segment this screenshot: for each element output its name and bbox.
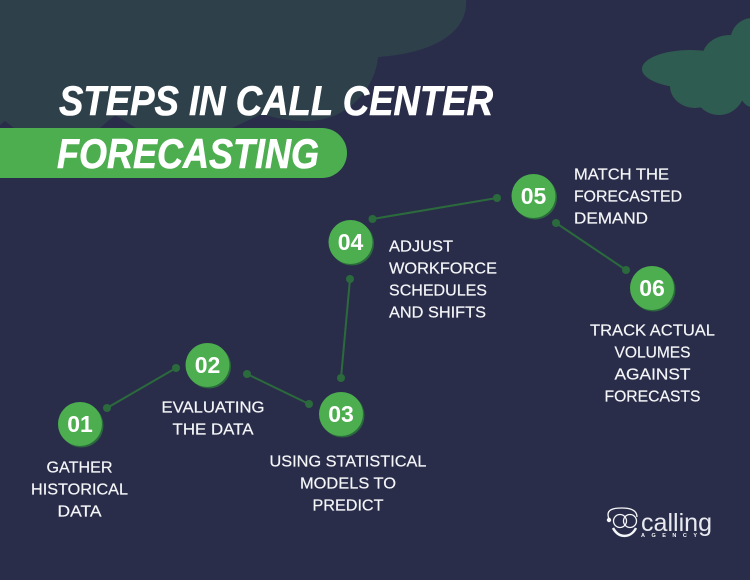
step 01 label: [31, 460, 128, 520]
title line 2: FORECASTING: [57, 130, 319, 177]
step 02 label: EVALUATING: [162, 400, 264, 416]
step 05 badge: [512, 174, 557, 220]
step 06 label: AGAINST: [614, 366, 691, 384]
step 01 badge: 01: [67, 411, 93, 437]
step 04 label: [389, 238, 497, 322]
step 03 label: MODELS TO: [300, 476, 396, 492]
step 01 label: GATHER: [46, 460, 112, 476]
step 06 label: TRACK ACTUAL: [590, 322, 715, 340]
step 06 label: FORECASTS: [604, 388, 700, 406]
step 02 label: THE DATA: [172, 422, 254, 438]
step 04 label: SCHEDULES: [389, 282, 487, 300]
step 03 badge: 03: [328, 401, 354, 427]
step 02 badge: 02: [195, 352, 220, 378]
step 02 badge: [186, 343, 231, 388]
connector 04 to 05: [368, 194, 501, 223]
step 05 label: MATCH THE: [574, 166, 669, 184]
step 04 label: ADJUST: [389, 238, 453, 256]
step 02 label: [162, 400, 264, 438]
step 01 badge: [58, 402, 104, 448]
step 01 label: HISTORICAL: [31, 482, 128, 498]
step 06 badge: 06: [639, 275, 665, 301]
step 05 label: [574, 166, 682, 228]
step 05 label: FORECASTED: [574, 188, 682, 206]
wordmark: calling: [641, 509, 712, 537]
logo: Calling Agency: [607, 508, 712, 539]
tagline: AGENCY: [641, 533, 697, 539]
step 03 label: USING STATISTICAL: [270, 454, 427, 470]
step 04 label: AND SHIFTS: [389, 304, 486, 322]
step 01 label: DATA: [58, 504, 102, 520]
connector 02 to 03: [243, 370, 313, 408]
title banner: [0, 128, 347, 178]
step 05 label: DEMAND: [574, 210, 648, 228]
title line 1: STEPS IN CALL CENTER: [59, 77, 494, 124]
background blob: top right: [642, 18, 750, 115]
step 06 label: VOLUMES: [614, 344, 690, 362]
step 04 badge: 04: [338, 229, 363, 255]
connector 05 to 06: [552, 219, 630, 274]
step 04 badge: [328, 220, 374, 266]
background blob: top left: [0, 0, 466, 128]
connector 01 to 02: [103, 364, 180, 412]
step 03 badge: [319, 392, 364, 438]
step 03 label: PREDICT: [312, 498, 384, 514]
icon: headset: [607, 508, 637, 536]
step 05 badge: 05: [521, 183, 546, 209]
step 04 label: WORKFORCE: [389, 260, 497, 278]
connector 03 to 04: [337, 275, 354, 382]
step 06 label: [590, 322, 715, 406]
step 06 badge: [630, 266, 676, 312]
step 03 label: [270, 454, 427, 514]
